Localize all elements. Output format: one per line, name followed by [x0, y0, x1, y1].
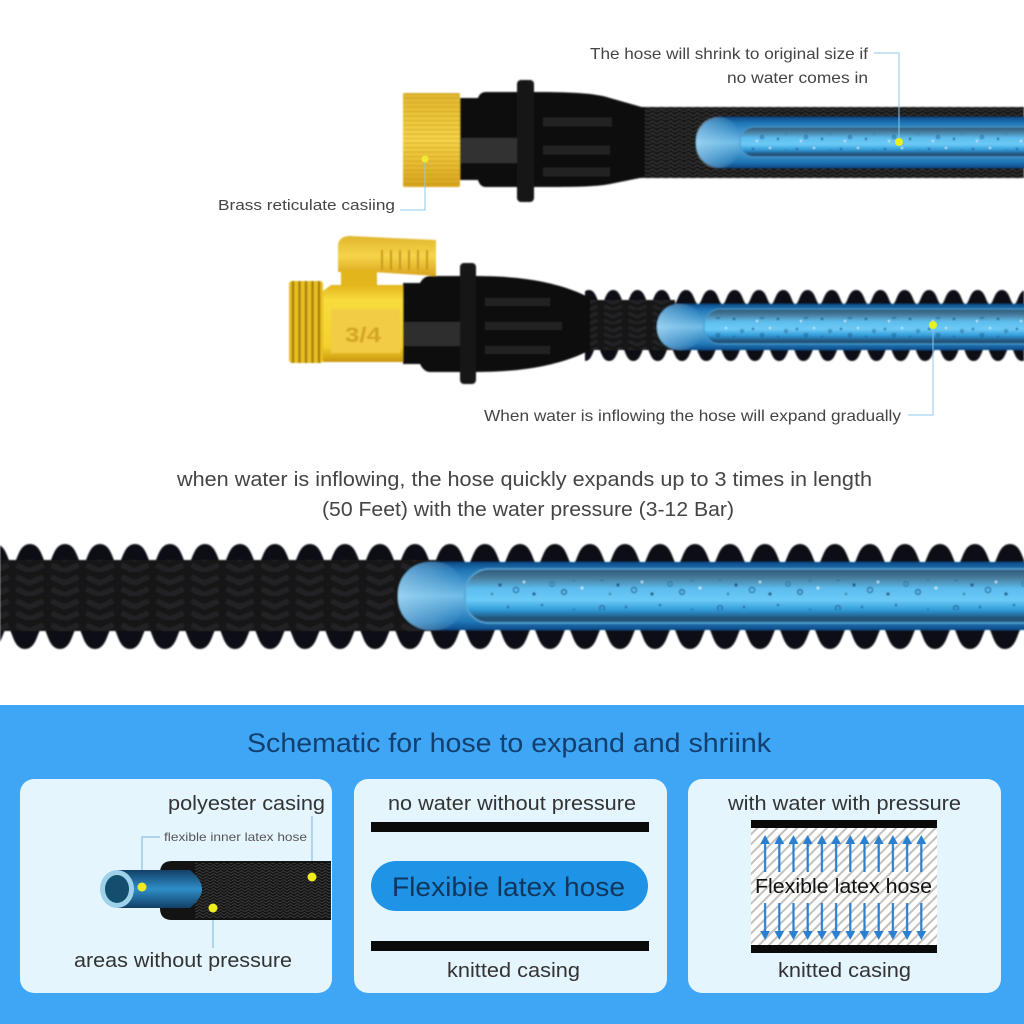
hatched hose	[751, 827, 937, 945]
water channel	[465, 569, 1024, 623]
top casing bar	[371, 822, 649, 832]
tube opening	[100, 870, 134, 908]
label: knitted casing	[778, 960, 911, 982]
callout: brass: Brass reticulate casiing	[218, 197, 395, 214]
label: knitted casing	[447, 960, 580, 982]
blue schematic band	[0, 705, 1024, 1024]
top shrunk hose with connector	[403, 80, 1024, 202]
description text	[176, 469, 872, 521]
black connector	[403, 276, 590, 372]
black connector	[460, 92, 645, 187]
braid	[0, 560, 440, 631]
tube	[118, 870, 202, 908]
callout: shrink	[590, 46, 903, 146]
connector ribs	[543, 122, 612, 172]
large expanded hose	[0, 544, 1024, 649]
heading: no water without pressure	[388, 793, 636, 815]
blue tube	[657, 304, 1024, 350]
ribs	[485, 302, 562, 350]
hose label: Flexible latex hose	[755, 876, 932, 898]
water channel	[704, 309, 1024, 344]
leader lines	[142, 816, 312, 948]
handle ribs	[382, 250, 427, 270]
bottom casing bar	[371, 941, 649, 951]
callout: expand	[484, 321, 937, 425]
connector flange	[517, 80, 534, 202]
bumps	[0, 544, 1024, 564]
down arrows	[758, 902, 928, 942]
schematic title: Schematic for hose to expand and shriink	[247, 728, 772, 758]
3/4 mark: 3/4	[345, 324, 381, 347]
casing	[160, 861, 331, 920]
callout: shrink: The hose will shrink to original size if	[590, 46, 869, 63]
bottom bar	[751, 945, 937, 953]
callout: brass	[218, 156, 428, 214]
markers	[138, 882, 146, 892]
callout: shrink: no water comes in	[727, 70, 868, 87]
valve stem	[341, 270, 377, 288]
panel: with water	[688, 779, 1001, 993]
valve body	[323, 285, 403, 362]
hose bumps	[585, 290, 1024, 304]
flange	[460, 263, 476, 384]
water channel	[740, 127, 1024, 157]
description text: when water is inflowing, the hose quickly expands up to 3 times in length	[176, 469, 872, 491]
valve handle	[338, 236, 436, 276]
panel: structure	[20, 779, 332, 993]
areas label: areas without pressure	[74, 950, 292, 972]
top bar	[751, 820, 937, 828]
inner hose label: flexible inner latex hose	[164, 830, 307, 844]
heading: with water with pressure	[727, 793, 961, 815]
description text: (50 Feet) with the water pressure (3-12 Bar)	[322, 499, 734, 521]
collar highlight	[403, 322, 460, 346]
middle expanding hose with valve	[289, 236, 1024, 384]
blue tube	[398, 562, 1024, 630]
panel: no water	[354, 779, 667, 993]
valve face	[331, 309, 400, 353]
braided hose body	[640, 107, 1024, 178]
latex hose pill: Flexibie latex hose	[392, 872, 625, 902]
brass reticulate casing	[403, 93, 460, 187]
blue inner tube	[696, 117, 1024, 168]
callout: expand: When water is inflowing the hose will expand gradually	[484, 408, 901, 425]
collar highlight	[460, 138, 518, 163]
thread	[289, 281, 323, 363]
latex hose pill	[371, 861, 648, 911]
up arrows	[758, 834, 928, 874]
polyester label: polyester casing	[168, 793, 325, 815]
